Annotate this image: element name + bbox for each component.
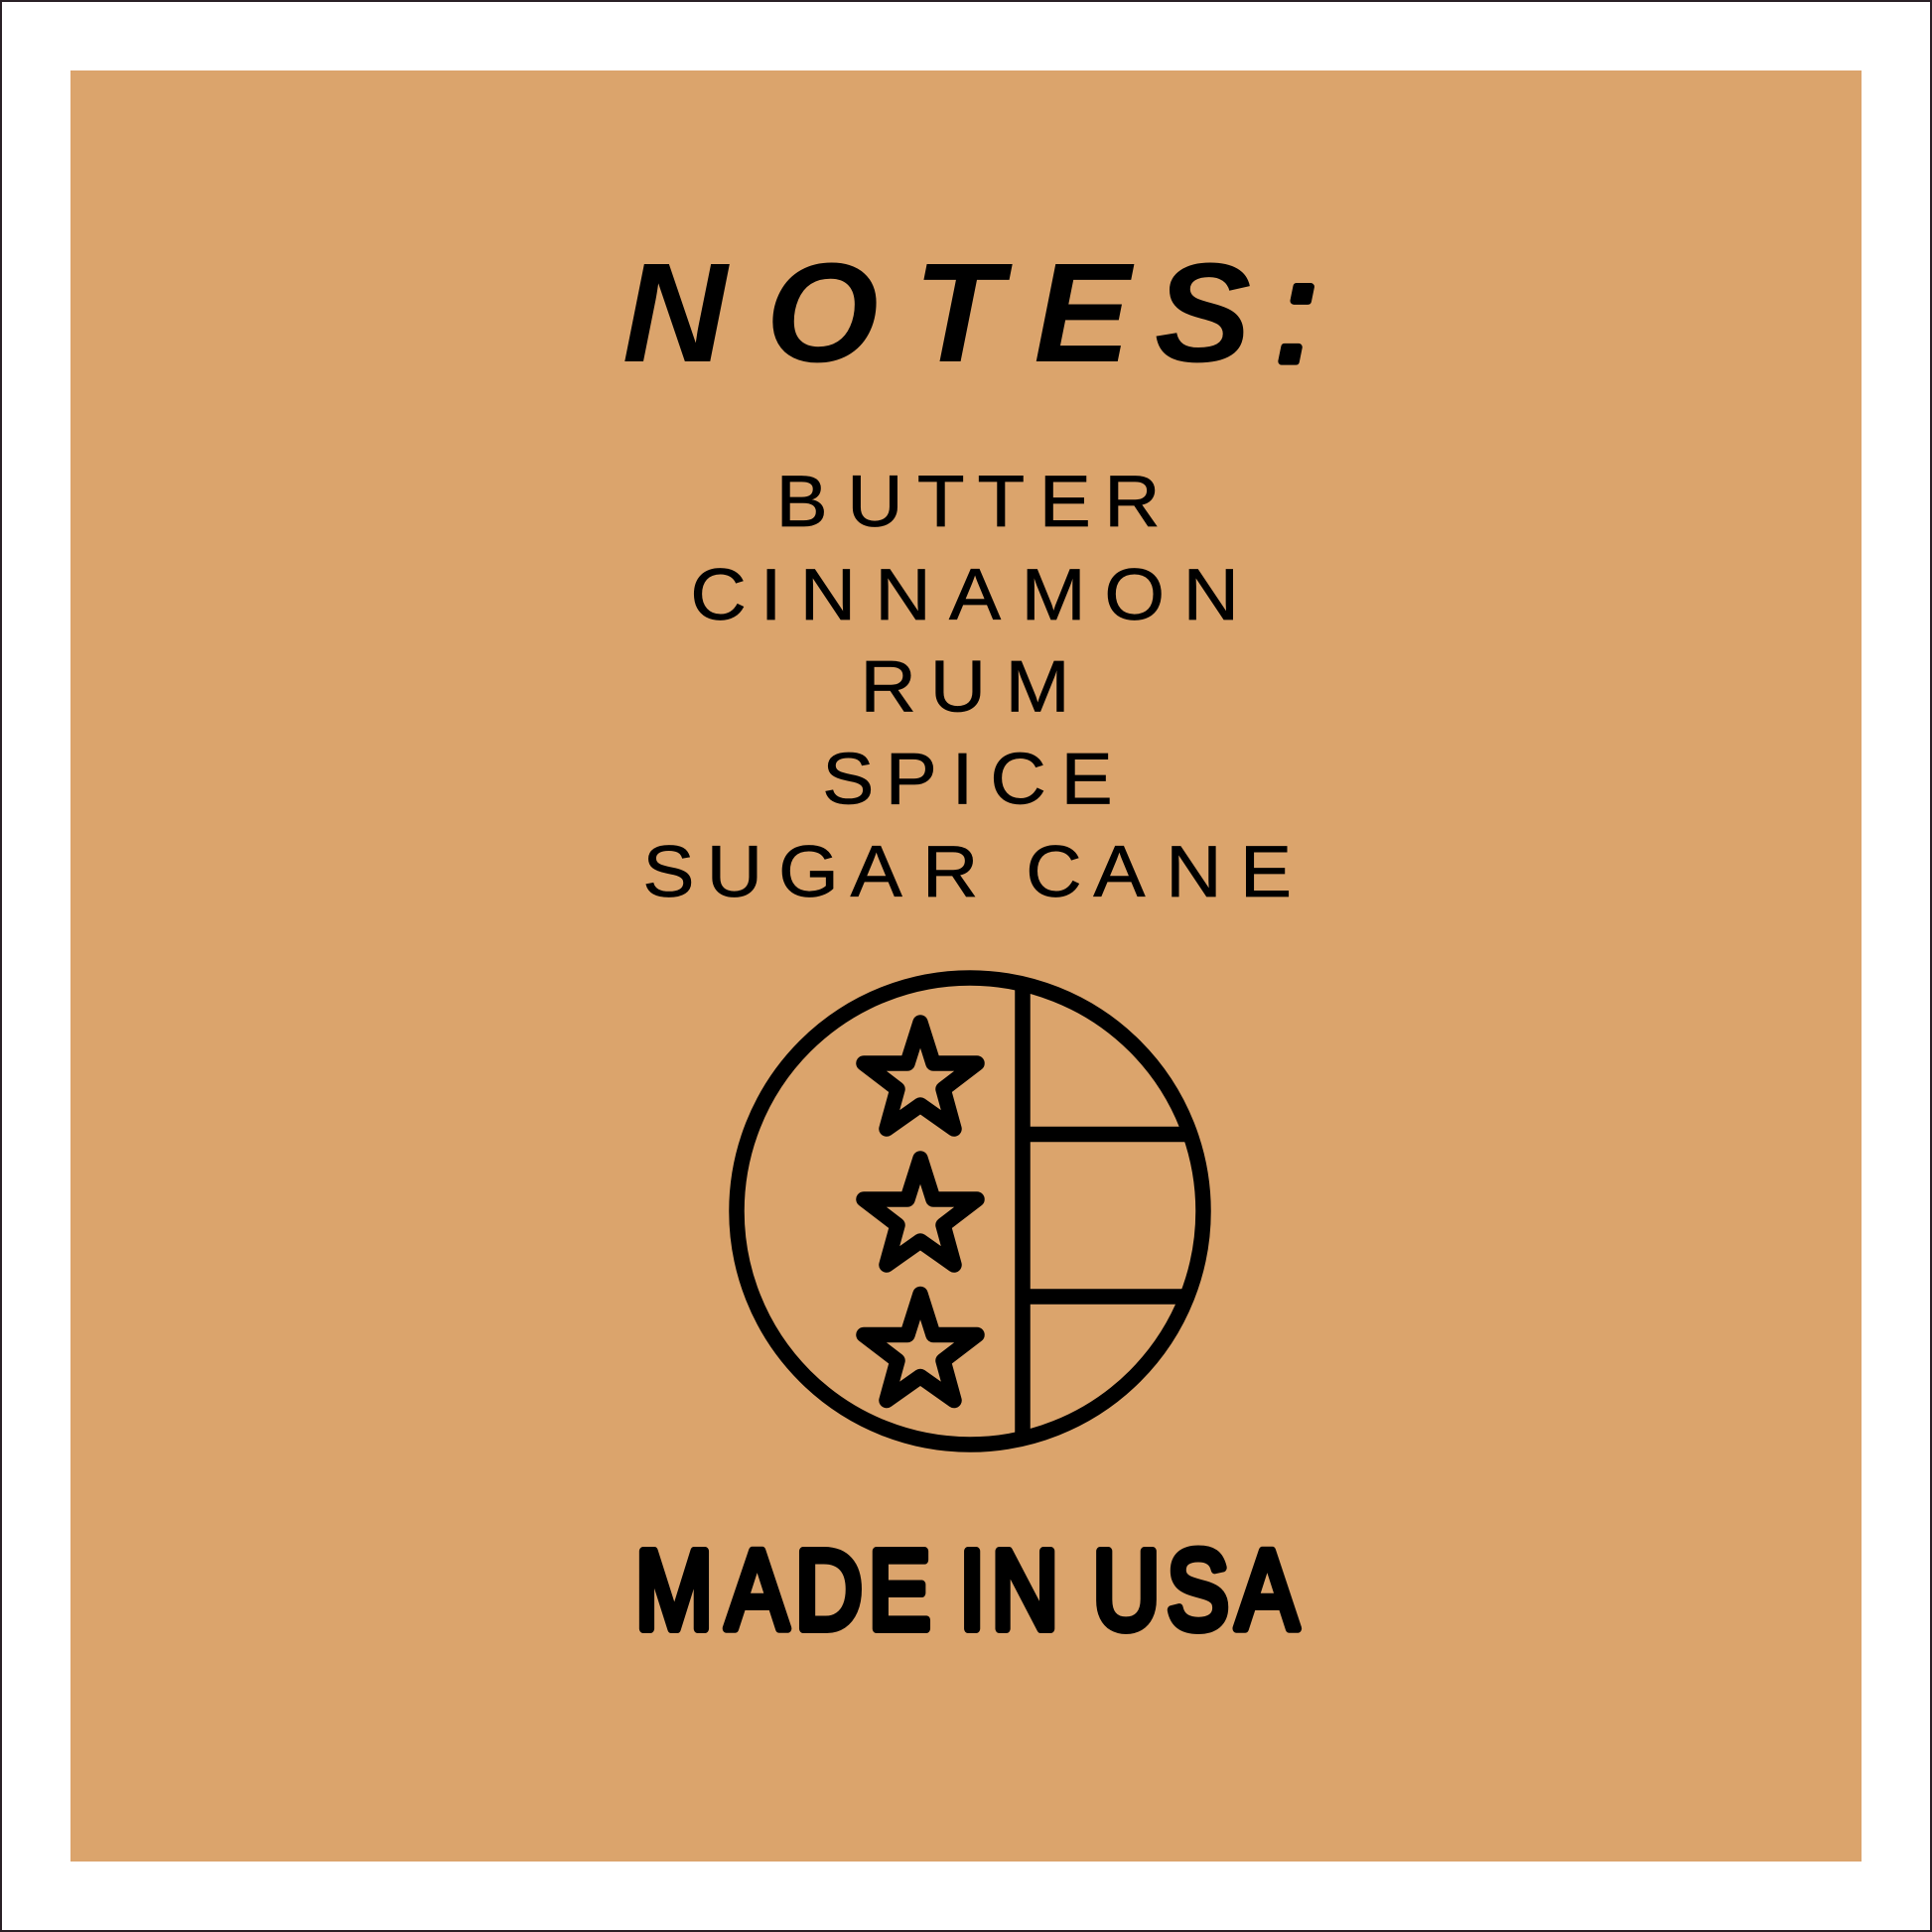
icon: lower stripe line (1023, 1289, 1187, 1305)
note: spice: SPICE (822, 740, 1113, 820)
title: notes: NOTES (622, 233, 1251, 392)
icon: top star (864, 1023, 977, 1129)
icon: middle star (864, 1159, 977, 1265)
list of tasting notes (642, 462, 1292, 912)
icon: vertical divider (1015, 984, 1031, 1439)
made in usa label: MADE IN USA (635, 1528, 1299, 1654)
note: sugar cane: SUGAR CANE (642, 832, 1292, 912)
icon: bottom star (864, 1295, 977, 1400)
note: butter: BUTTER (776, 462, 1161, 542)
icon: circle outline (737, 978, 1203, 1445)
title: notes: : (1276, 233, 1316, 392)
note: cinnamon: CINNAMON (690, 555, 1239, 635)
icon: american flag globe with three stars (737, 978, 1203, 1445)
icon: upper stripe line (1023, 1127, 1190, 1142)
note: rum: RUM (860, 647, 1070, 728)
